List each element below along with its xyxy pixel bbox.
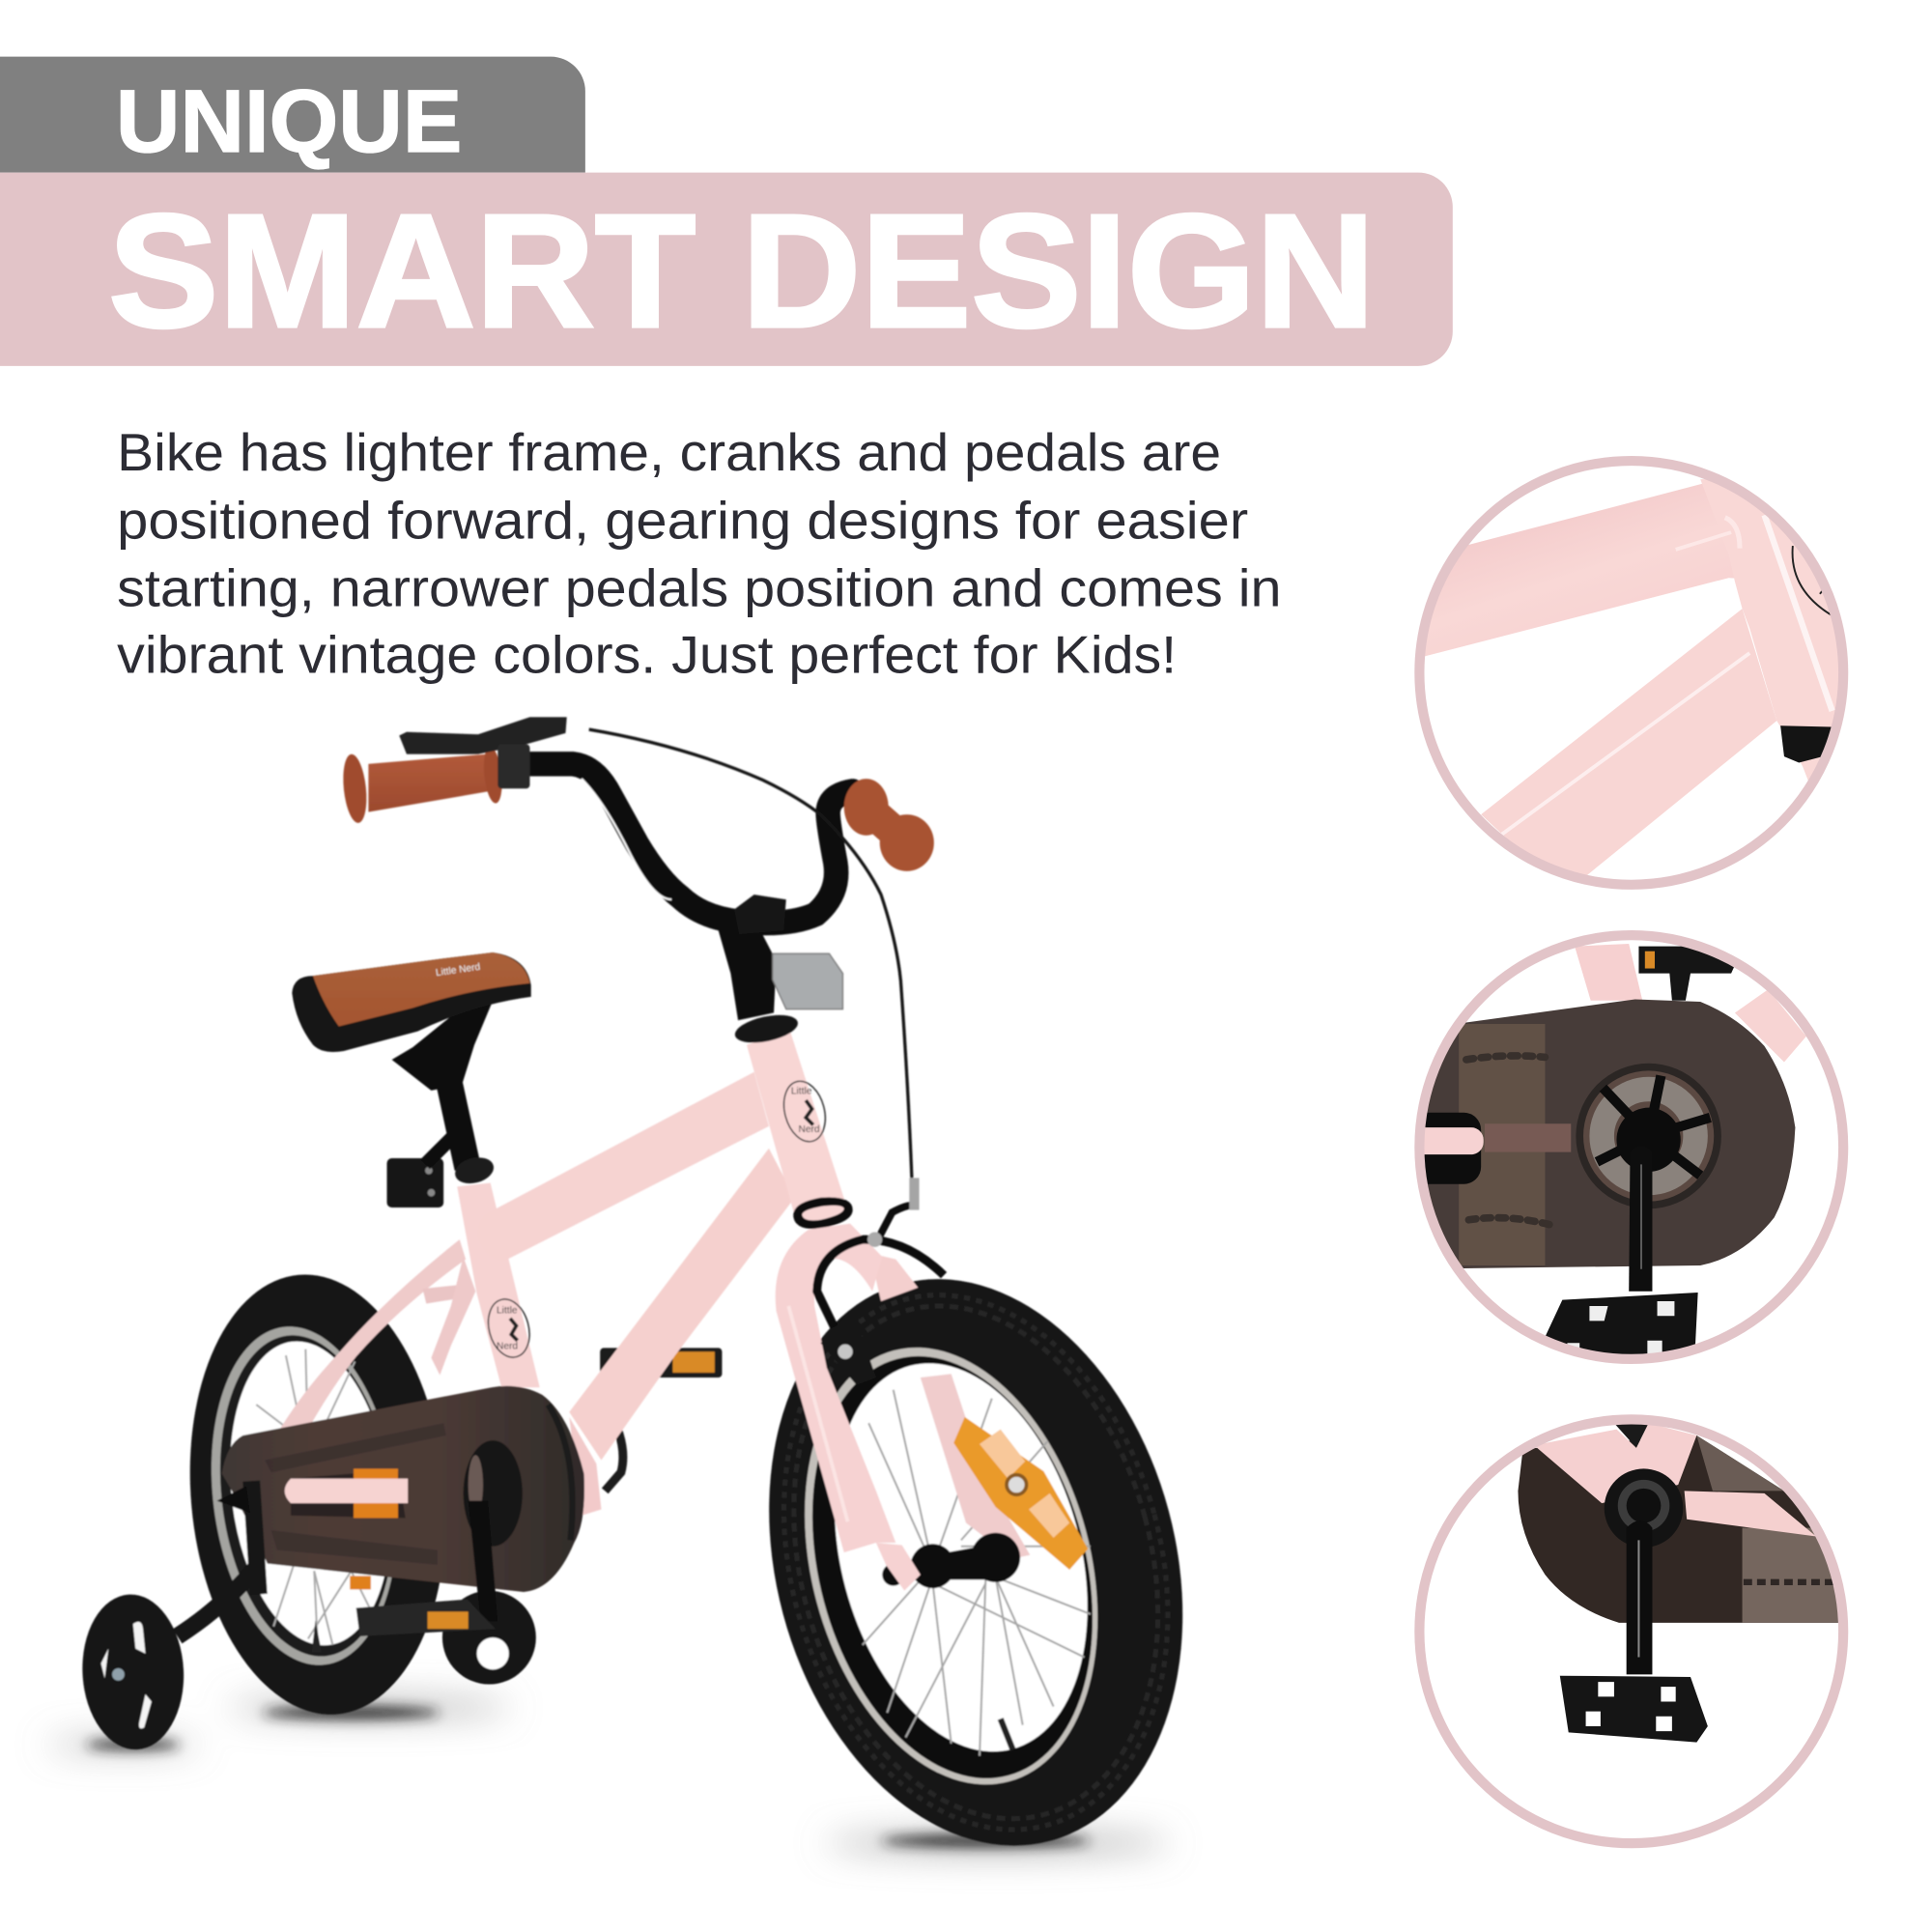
header banner: SMART DESIGN: SMART DESIGN	[108, 182, 1375, 361]
detail circle: bottom bracket and pedal	[1419, 1419, 1848, 1843]
rear wheel	[172, 1264, 464, 1725]
front reflector	[773, 953, 842, 1009]
bicycle illustration	[46, 717, 1243, 1892]
header tab: UNIQUE	[0, 57, 585, 173]
lower head collar	[793, 1197, 853, 1229]
logo badge	[482, 1076, 832, 1362]
wheel reflector	[953, 1417, 1088, 1570]
rack bracket	[423, 1285, 457, 1303]
description text: positioned forward, gearing designs for easier	[117, 490, 1248, 550]
valve	[1001, 1719, 1012, 1749]
right grip	[867, 807, 907, 842]
rear brace	[431, 1257, 475, 1375]
brake caliper	[817, 1239, 944, 1327]
frame: Nerd	[799, 1124, 820, 1135]
frame: Little	[791, 1087, 812, 1097]
spokes	[863, 1390, 1091, 1756]
head tube	[747, 1030, 849, 1225]
description text: vibrant vintage colors. Just perfect for Kids!	[117, 624, 1177, 684]
guard slot	[291, 1470, 406, 1518]
description text: starting, narrower pedals position and comes in	[117, 558, 1282, 618]
saddle	[292, 952, 531, 1052]
front fork and brake	[776, 1178, 944, 1591]
lower reflector sliver	[350, 1576, 371, 1589]
saddle: Little Nerd	[435, 962, 481, 979]
description text	[117, 422, 1282, 684]
seat post and clamp	[387, 1001, 497, 1208]
stem	[719, 925, 777, 1020]
frame: Nerd	[497, 1342, 518, 1352]
front wheel	[708, 1233, 1243, 1892]
description text: Bike has lighter frame, cranks and pedals are	[117, 422, 1221, 482]
seat stay	[276, 1239, 466, 1435]
down tube	[569, 1149, 795, 1460]
crank and near pedal	[356, 1501, 536, 1685]
training wheel	[78, 1481, 259, 1752]
chain guard	[222, 1386, 584, 1592]
top tube	[477, 1072, 769, 1262]
left grip	[368, 754, 497, 812]
handlebar	[340, 717, 934, 1178]
detail circle: chain guard and crank	[1405, 935, 1843, 1368]
chainring opening	[464, 1440, 523, 1547]
hub	[933, 1543, 1001, 1579]
seat tube	[457, 1182, 540, 1387]
brake cable	[589, 729, 912, 1178]
far pedal	[600, 1348, 722, 1491]
ground shadows	[46, 1699, 1171, 1853]
front fork rear leg	[921, 1374, 1030, 1559]
header tab: UNIQUE: UNIQUE	[116, 72, 462, 171]
frame	[276, 1030, 853, 1516]
frame: Little	[497, 1306, 518, 1317]
brake lever	[399, 717, 567, 754]
detail circle: frame joint	[1380, 461, 1861, 894]
